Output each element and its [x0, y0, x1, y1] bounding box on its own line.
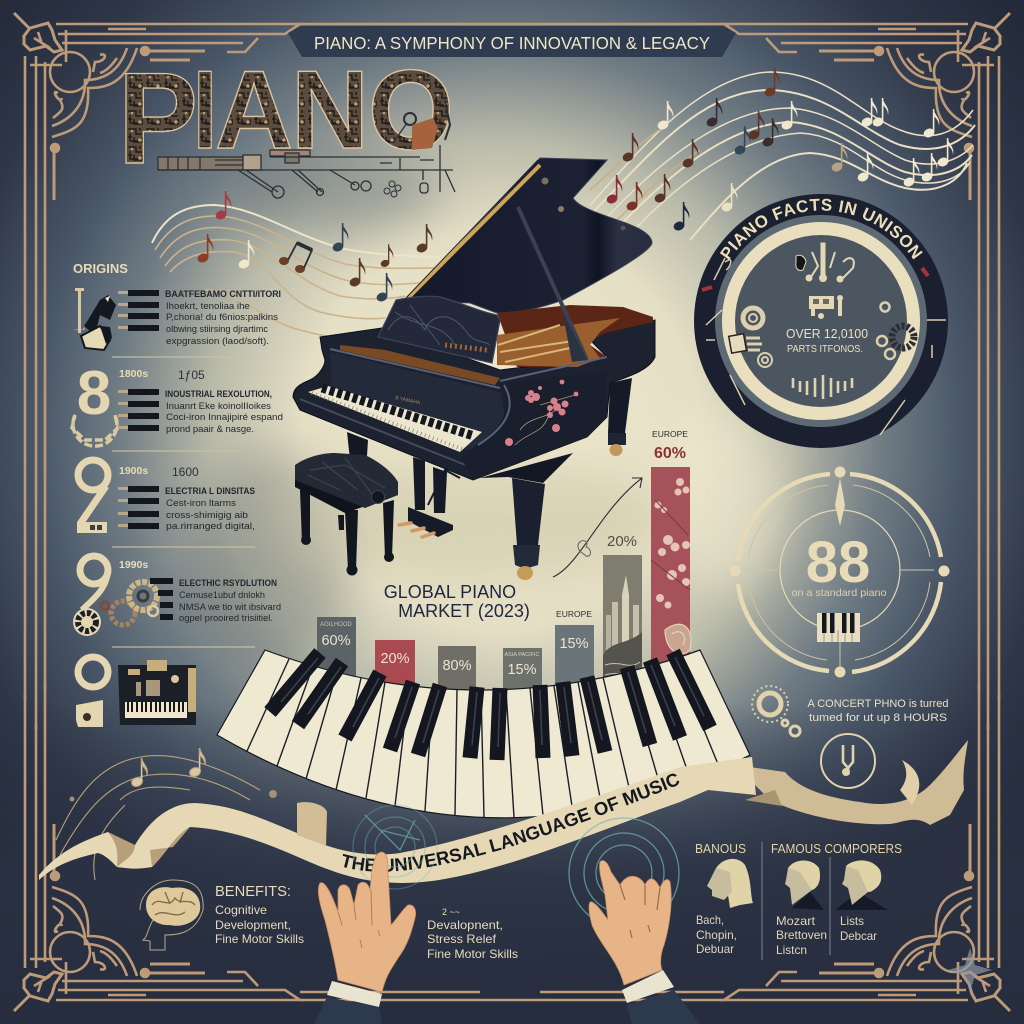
icon: hammers	[796, 243, 854, 282]
case interior	[497, 305, 653, 367]
heading: PIANO	[118, 45, 454, 191]
era: digital with circuit board	[76, 657, 196, 727]
composer names: Brettoven	[776, 928, 827, 942]
heading: PIANO: A	[215, 48, 293, 172]
heading: PIANO: O	[368, 47, 454, 173]
panel: famous composers	[695, 841, 902, 960]
bar: skyline 20%	[603, 533, 642, 715]
black keys	[270, 652, 710, 760]
curved keyboard	[217, 650, 750, 818]
bar: skyline 20%: 20%	[607, 533, 637, 550]
era: 1990s: ELECTHIC RSYDLUTION	[179, 578, 277, 588]
icon: tuning dial	[752, 686, 800, 736]
portrait: first composer	[707, 859, 753, 908]
heading: PIANO: N	[291, 48, 369, 172]
era: 1800s: 8	[77, 359, 111, 428]
fallboard	[330, 352, 507, 450]
right floating notes	[605, 68, 953, 232]
era: 1900s: Cest-iron ltarms	[166, 498, 236, 509]
bar: 15%: ASIA PACIFIC	[504, 652, 540, 658]
era: 1800s: prond paair & nasge.	[166, 424, 254, 435]
ribbon tail	[735, 740, 968, 825]
era: 1990s	[73, 556, 281, 636]
era: 1990s: Cemuse1ubuf dnlokh	[179, 590, 265, 601]
bar: 60%: AGILHOOD	[320, 622, 352, 628]
bar: 15%: 15%	[507, 662, 537, 678]
era: 1800s: Coci-iron Innajipiré espand	[166, 412, 283, 423]
right musical staff	[590, 72, 975, 245]
right cuff	[622, 970, 674, 1003]
left musical staff	[152, 205, 440, 339]
icon: center flag	[809, 295, 843, 319]
left sleeve	[314, 997, 382, 1024]
heading: PIANO: I	[193, 48, 217, 172]
timeline: origins	[72, 261, 283, 727]
composer names: Debuar	[696, 942, 734, 956]
text: parts: OVER 12,0100	[786, 327, 868, 341]
piano shadow	[290, 460, 670, 580]
bar: europe 60% blossoms	[651, 429, 691, 707]
ribbon roll	[297, 802, 327, 846]
right hand	[589, 860, 700, 1024]
maker mark: B YAMAHA	[395, 395, 421, 406]
bar: 80%: 80%	[442, 658, 472, 674]
bar: europe 60% blossoms: EUROPE	[652, 429, 688, 439]
ring accents	[702, 258, 946, 435]
left cuff	[327, 981, 382, 1007]
banner ribbon	[39, 757, 756, 883]
item 1 text: P,choria! du f6nios:palkins	[166, 312, 278, 323]
item 1 bars	[118, 290, 159, 331]
bar: 15%	[503, 648, 542, 718]
portrait: third composer	[835, 860, 888, 910]
decoration: left ribbon lines and notes	[56, 748, 277, 880]
number: 88: 88	[806, 530, 870, 595]
icon: brain in head	[140, 880, 203, 950]
item 1 text: Ihoekrt, tenoliaa ihe	[166, 301, 250, 312]
item 1 text: expgrassion (laod/soft).	[166, 336, 269, 347]
text: benefits	[215, 883, 304, 946]
composer names: Lists	[840, 914, 864, 928]
bar: europe 15%: 15%	[559, 636, 589, 652]
watermark sparkle	[948, 948, 992, 992]
era: 1800s: 1ƒ05	[178, 368, 205, 382]
icon: gears	[101, 582, 158, 625]
music desk	[378, 296, 500, 363]
era: 1990s: NMSA we tio wit ibsivard	[179, 602, 281, 613]
bar chart: market share	[317, 429, 691, 718]
bar: 20% red: 20%	[380, 651, 410, 667]
text: benefits continued: 2 ~~	[442, 907, 460, 917]
text: benefits: Fine Motor Skills	[215, 932, 304, 946]
origins heading: ORIGINS	[73, 261, 128, 276]
icon: tuning fork	[821, 734, 875, 788]
icon: damper row	[793, 375, 852, 399]
composer names: Listcn	[776, 943, 807, 957]
era: 1800s: INOUSTRIAL REXOLUTION,	[165, 389, 272, 399]
caption: on a standard piano	[792, 587, 887, 599]
era: 1900s	[77, 460, 255, 533]
back leg	[608, 378, 632, 456]
front right leg	[480, 453, 573, 580]
bar: 60%: 60%	[321, 633, 351, 649]
circuit strip under heading	[158, 100, 455, 198]
lid	[404, 158, 652, 313]
composer names	[696, 913, 877, 957]
prop stick	[518, 207, 587, 360]
icon: gears and rings	[729, 302, 914, 367]
era: 1800s: 1800s	[119, 368, 148, 380]
text: benefits continued: Stress Relef	[427, 932, 497, 946]
era: 1990s: 1990s	[119, 559, 148, 571]
item 1 text: olbwing stiirsing djrartimc	[166, 324, 268, 335]
era: 1900s: 1600	[172, 465, 199, 479]
era: 1900s: pa.rirranged digital,	[166, 521, 255, 532]
text: benefits continued	[427, 907, 518, 961]
lyre and pedals	[399, 457, 460, 537]
ribbon text: THE UNIVERSAL LANGUAGE OF MUSIC	[342, 774, 680, 872]
bar: 80%	[438, 646, 476, 716]
text: parts	[786, 327, 868, 355]
right cheek with blossoms	[462, 357, 607, 480]
callout: tuning: tumed for ut up 8 HOURS	[809, 712, 947, 724]
era: 1900s: cross-shimigig aib	[166, 510, 248, 521]
text: benefits continued: Fine Motor Skills	[427, 947, 518, 961]
chart heading: global piano market	[384, 582, 530, 621]
text: parts: PARTS ITFONOS.	[787, 344, 863, 355]
panel: famous composers: FAMOUS COMPORERS	[771, 841, 902, 856]
bar: europe 15%	[555, 609, 594, 715]
title banner	[288, 26, 736, 57]
text: benefits: Development,	[215, 918, 291, 932]
text: benefits: BENEFITS:	[215, 883, 291, 900]
chart heading: global piano market: MARKET (2023)	[398, 601, 530, 621]
item 1 text: BAATFEBAMO CNTTI/ITORI	[165, 289, 281, 299]
body	[293, 320, 655, 480]
era: 1990s: ogpel prooired trisiitiel.	[179, 613, 273, 624]
callout: tuning: A CONCERT PHNO is turred	[808, 698, 948, 710]
text: benefits: Cognitive	[215, 903, 267, 917]
panel: 88 keys dial	[730, 466, 950, 678]
portrait: second composer	[785, 860, 824, 910]
arrow: growth trend	[553, 478, 642, 577]
composer names: Bach,	[696, 913, 724, 927]
left hand	[314, 852, 416, 1024]
era: 1800s: Inuanrt Eke koinolIIoikes	[166, 401, 271, 412]
grand piano	[293, 158, 655, 580]
chart heading: global piano market: GLOBAL PIANO	[384, 582, 516, 602]
ribbon text path	[340, 778, 695, 872]
left floating notes	[196, 191, 432, 303]
era: 1900s: 1900s	[119, 465, 148, 477]
teal touch rings	[353, 805, 679, 928]
era: 1900s: ELECTRIA L DINSITAS	[165, 486, 255, 496]
front left leg	[347, 432, 368, 488]
panel: piano facts ring	[694, 194, 948, 448]
icon: hammer mechanism	[73, 288, 116, 350]
title banner: PIANO: A SYMPHONY OF INNOVATION & LEGACY	[314, 33, 710, 53]
icon: mini keyboard	[817, 613, 860, 642]
composer names: Chopin,	[696, 928, 737, 942]
callout: tuning	[752, 686, 948, 788]
ring heading: PIANO FACTS IN UNISON	[720, 198, 923, 260]
panel: famous composers: BANOUS	[695, 841, 746, 856]
bar: 20% red	[375, 640, 415, 710]
bar: 60%	[317, 617, 356, 697]
right sleeve	[627, 990, 700, 1024]
bar: europe 60% blossoms: 60%	[654, 445, 686, 462]
piano bench	[295, 453, 398, 576]
item 1 text	[165, 289, 281, 347]
composer names: Mozart	[776, 914, 816, 928]
keyboard	[300, 386, 482, 466]
era: 1800s	[72, 359, 283, 446]
heading: PIANO: P	[118, 45, 198, 191]
bar: europe 15%: EUROPE	[556, 609, 592, 619]
composer names: Debcar	[840, 929, 877, 943]
text: benefits continued: Devalopnent,	[427, 918, 503, 932]
